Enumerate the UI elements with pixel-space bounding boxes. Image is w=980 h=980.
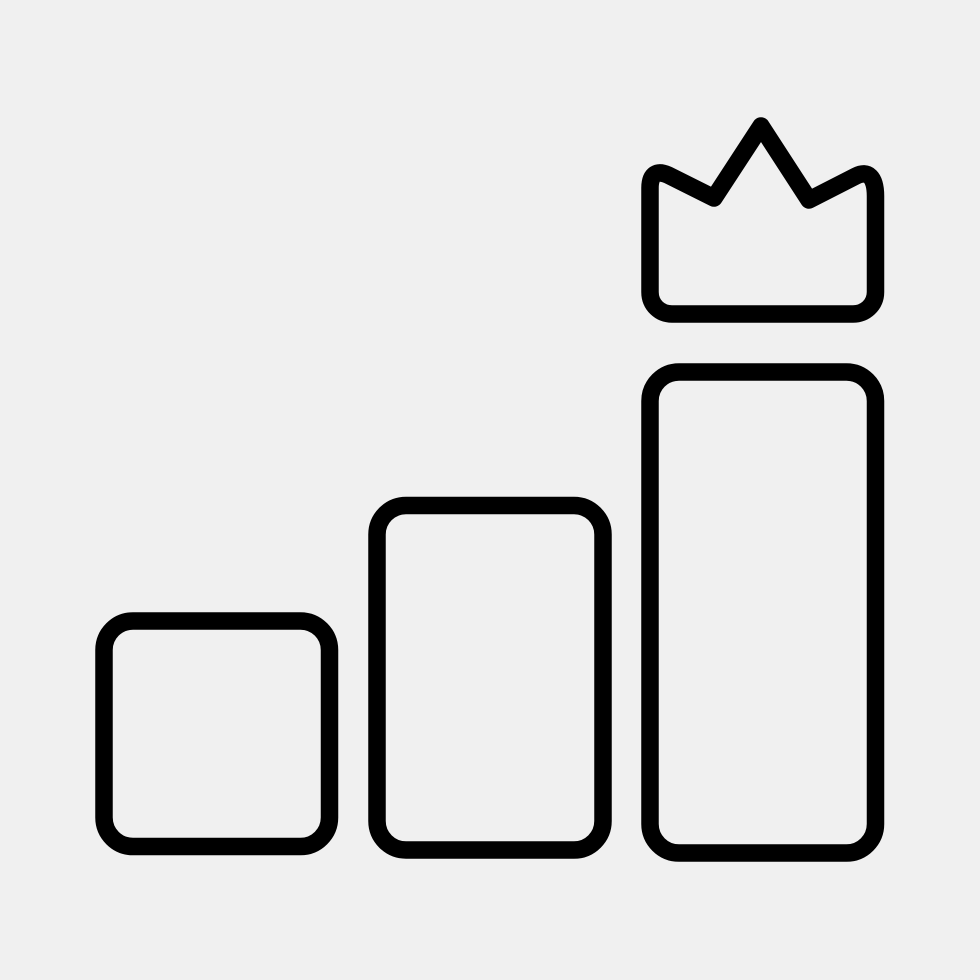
tall bar <box>650 372 876 853</box>
small bar <box>104 621 330 846</box>
medium bar <box>377 506 603 850</box>
crown <box>650 126 876 314</box>
